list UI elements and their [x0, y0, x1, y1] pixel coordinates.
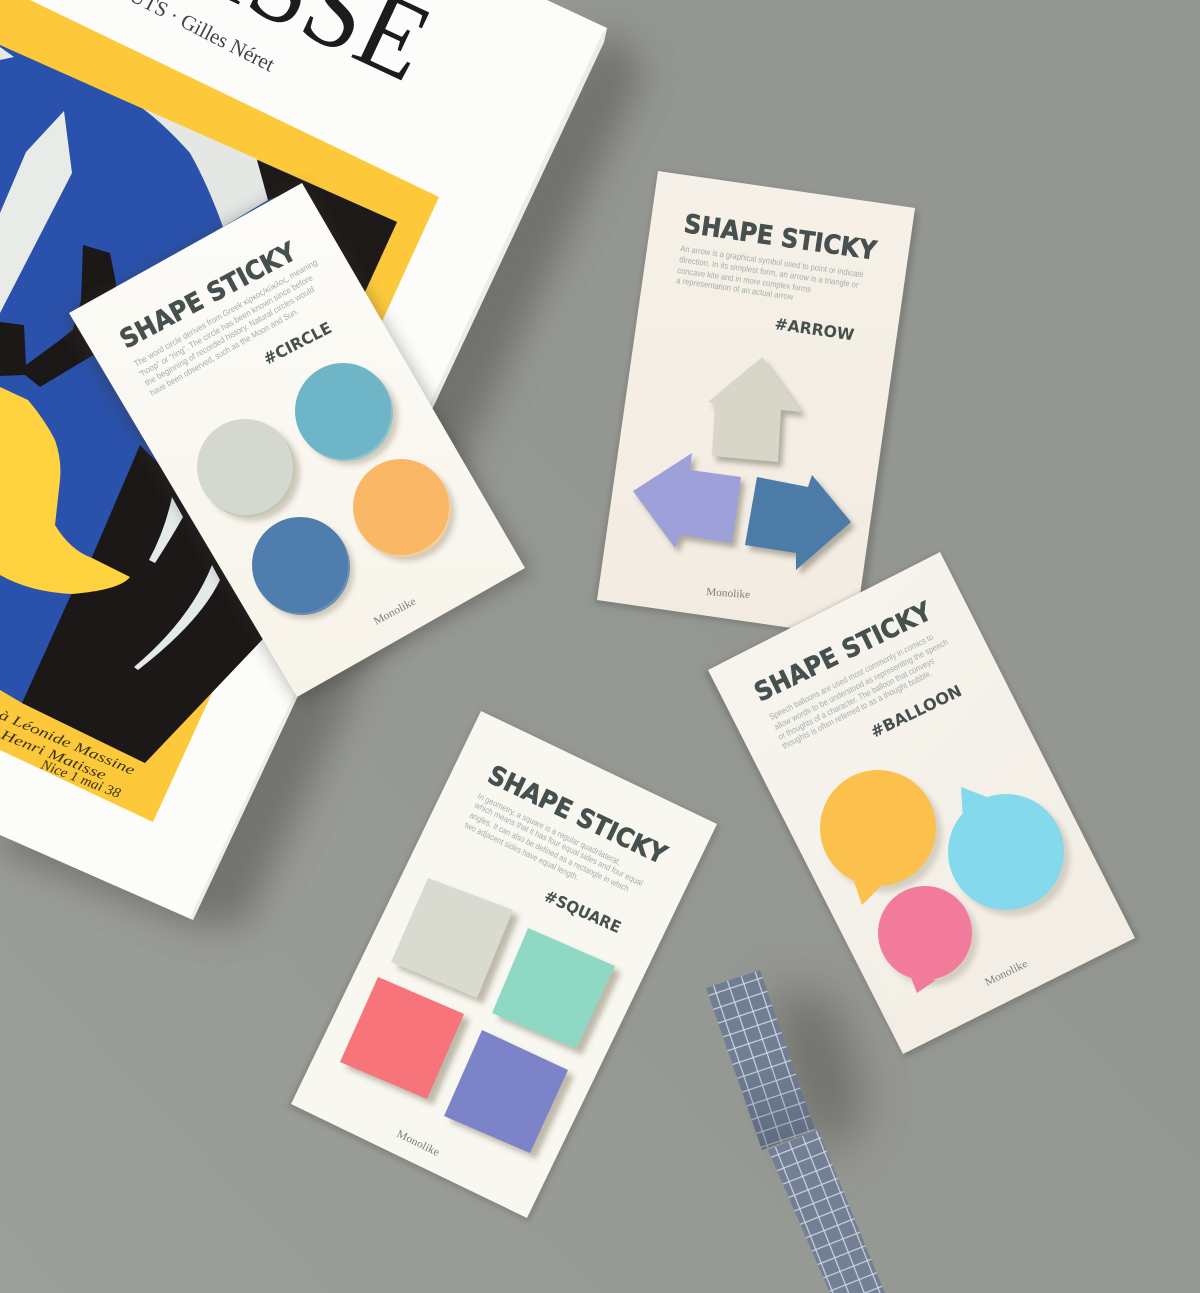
panel: circle card [63, 183, 531, 703]
icon: orange circle [353, 459, 451, 557]
yellow art border [0, 0, 439, 822]
black upper shape [257, 160, 397, 292]
icon: yellow speech balloon [820, 770, 936, 905]
square card title: SHAPE STICKY [483, 760, 672, 871]
balloon card description [767, 632, 950, 751]
icon: left arrow note [633, 453, 741, 548]
book spine edge [190, 28, 607, 920]
white sword shape [0, 111, 72, 313]
tape lower strip [768, 1130, 885, 1293]
signature line two: Henri Matisse [0, 727, 108, 784]
line three: angles. It can also be defined as a rectangle in which [468, 810, 631, 894]
circle card shadow [63, 183, 531, 703]
small white tip [0, 47, 14, 60]
line two: direction. In its simplest form, an arrow is a triangle or [679, 254, 859, 290]
arrow notes shadows [637, 362, 855, 575]
icon: blue circle [252, 517, 350, 615]
line one: Speech balloons are used most commonly in comics to [767, 632, 935, 722]
line four: a representation of an actual arrow [676, 275, 795, 302]
icon: sky blue speech balloon [948, 787, 1064, 910]
icon: grey circle [197, 419, 295, 517]
tape shadow [770, 990, 865, 1165]
line four: thoughts is often referred to as a thought bubble. [780, 668, 933, 751]
arrow brand: Monolike [706, 586, 751, 601]
line one: In geometry, a square is a regular quadrilateral, [476, 791, 622, 867]
balloon brand: Monolike [983, 958, 1030, 989]
arrow card shadow [594, 171, 919, 640]
square brand: Monolike [395, 1128, 441, 1159]
square card description [463, 791, 645, 894]
balloon card body [708, 552, 1135, 1054]
line three: the beginning of recorded history. Natural circles would [143, 284, 316, 388]
line two: “hoop” or “ring”. The circle has been known since before [137, 272, 314, 379]
blue artwork field [0, 45, 397, 763]
circle card description [132, 257, 319, 398]
panel: grid washi tape [706, 970, 885, 1293]
square hashtag: #SQUARE [541, 886, 624, 937]
square notes shadows [346, 884, 621, 1159]
balloon notes shadows [826, 776, 1070, 986]
square card body [291, 711, 717, 1218]
icon: up arrow note [708, 357, 802, 462]
circle brand: Monolike [372, 595, 418, 628]
arrow hashtag: #ARROW [773, 314, 856, 344]
white curved strip upper [149, 497, 183, 563]
icon: teal circle [295, 363, 393, 461]
circle hashtag: #CIRCLE [260, 318, 335, 369]
artist signature [0, 708, 137, 802]
icon: right arrow note [745, 475, 851, 570]
icon: coral square [340, 977, 464, 1099]
panel: arrow card [594, 171, 919, 640]
circle card body [69, 183, 525, 697]
balloon hashtag: #BALLOON [867, 681, 965, 742]
tape roll end [706, 970, 815, 1150]
book cover [0, 0, 607, 920]
circle notes shadows [204, 369, 455, 619]
line one: The word circle derives from Greek κίρκος/κύκλος, meaning [132, 257, 319, 369]
panel: square card [287, 711, 720, 1222]
yellow figure [0, 387, 130, 594]
line two: allow words to be understood as representing the speech [772, 637, 950, 732]
circle card title: SHAPE STICKY [115, 237, 302, 355]
panel: balloon card [704, 552, 1140, 1058]
icon: mint square [492, 928, 615, 1049]
line two: which means that it has four equal sides and four equal [472, 799, 645, 888]
line four: two adjacent sides have equal length. [463, 820, 580, 882]
balloon card shadow [704, 552, 1140, 1058]
square card shadow [287, 711, 720, 1222]
white shape behind dome [142, 108, 268, 227]
black figure arm [0, 320, 110, 387]
icon: periwinkle square [444, 1030, 568, 1153]
arrow card body [597, 171, 915, 637]
signature line three: Nice 1 mai 38 [38, 757, 122, 802]
black hand shape [70, 245, 116, 340]
balloon card title: SHAPE STICKY [750, 596, 937, 708]
book shadow [0, 28, 645, 925]
white curved strip lower [134, 565, 220, 670]
arrow card description [676, 243, 864, 302]
line three: concave kite and in more complex forms [677, 265, 812, 294]
icon: pink speech balloon [878, 886, 972, 993]
icon: grey square [391, 878, 513, 998]
arrow card title: SHAPE STICKY [682, 209, 879, 267]
line three: or thoughts of a character. The balloon that conveys [776, 656, 936, 742]
panel: Matisse book [0, 0, 607, 920]
black lower block [22, 445, 300, 763]
tape roll shading [706, 970, 815, 1150]
line one: An arrow is a graphical symbol used to point or indicate [680, 243, 864, 279]
line four: have been observed, such as the Moon and Sun. [148, 306, 300, 398]
